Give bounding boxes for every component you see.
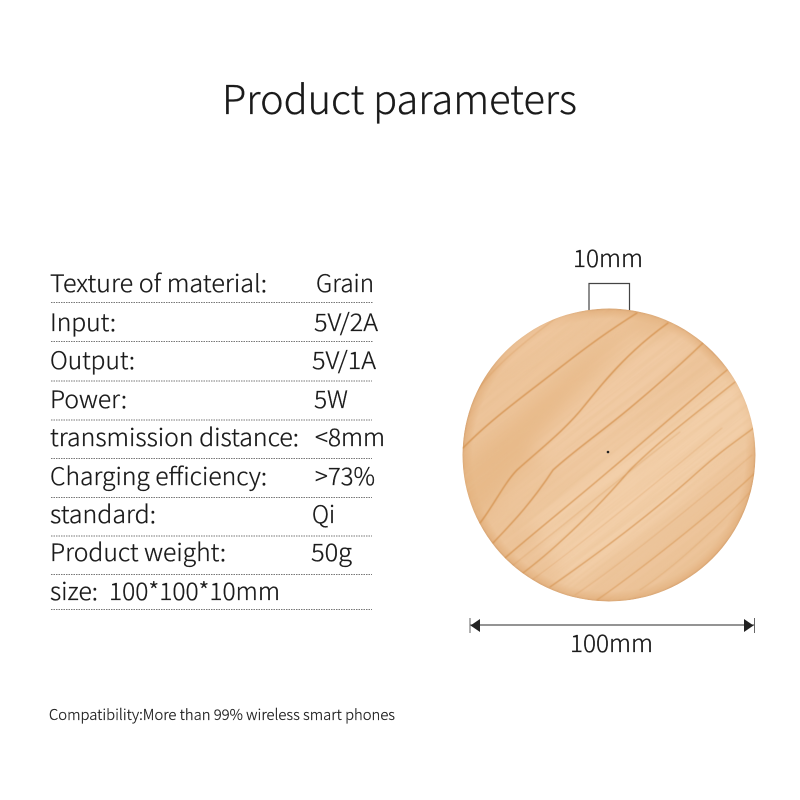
row: texture of material: Grain (316, 264, 374, 299)
panel: specification table (50, 264, 385, 610)
row: power: Power: (50, 380, 127, 415)
wood grain texture (464, 312, 747, 602)
title: Product parameters (222, 68, 577, 126)
row: transmission distance: transmission distance: (50, 418, 299, 453)
row: product weight: Product weight: (50, 533, 226, 568)
row: output: 5V/1A (312, 341, 376, 376)
row: output: Output: (50, 341, 135, 376)
wood tone bands (462, 312, 754, 580)
thickness bracket (589, 284, 630, 311)
row: transmission distance: <8mm (315, 418, 385, 453)
width label: 100mm (570, 624, 653, 659)
row: standard (50, 495, 335, 530)
row: charging efficiency (50, 457, 375, 492)
width arrow (470, 618, 754, 633)
row: standard: standard: (50, 495, 156, 530)
wood grain lines (463, 313, 755, 600)
row: size: size: (50, 572, 98, 607)
row: power (50, 380, 348, 415)
thickness label: 10mm (573, 239, 643, 274)
row: charging efficiency: Charging efficiency: (50, 457, 267, 492)
row: charging efficiency: >73% (315, 457, 375, 492)
compatibility note: Compatibility:More than 99% wireless smart phones (49, 704, 395, 725)
row: product weight: 50g (311, 533, 352, 568)
row: input: 5V/2A (314, 303, 378, 338)
row: input: Input: (50, 303, 116, 338)
row: power: 5W (314, 380, 348, 415)
row: product weight (50, 533, 352, 568)
row: texture of material: Texture of material: (50, 264, 267, 299)
row: texture of material (50, 264, 374, 299)
row: output (50, 341, 376, 376)
wooden charger disc (462, 308, 756, 602)
center indicator dot (607, 451, 609, 453)
row: input (50, 303, 378, 338)
row: standard: Qi (312, 495, 335, 530)
row: size: 100*100*10mm (109, 572, 280, 607)
